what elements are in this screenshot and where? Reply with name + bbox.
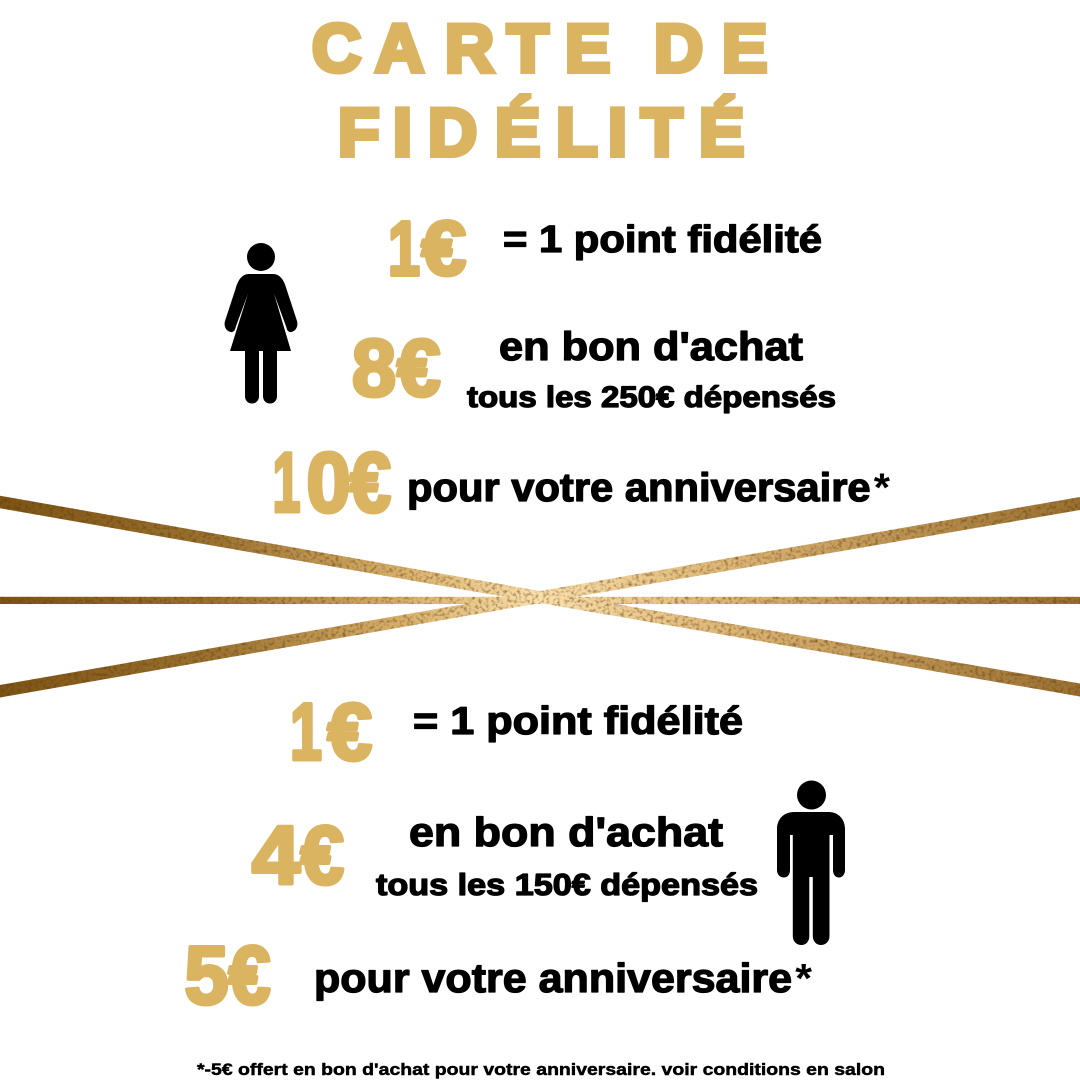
birthday, women: pour votre anniversaire * — [407, 466, 890, 510]
points rate, men — [290, 688, 743, 778]
birthday, women — [272, 436, 890, 530]
birthday, women: 0 — [306, 436, 350, 530]
birthday, women: 1 — [272, 436, 300, 530]
voucher, men: € — [300, 808, 344, 902]
voucher, women — [352, 324, 836, 414]
voucher, women: en bon d'achat — [499, 325, 803, 369]
footnote: *-5€ offert en bon d'achat pour votre anniversaire. voir conditions en salon — [197, 1060, 885, 1079]
points rate, women: 1 — [388, 206, 420, 292]
points rate, men: = 1 point fidélité — [413, 700, 743, 743]
birthday, men: € — [228, 928, 270, 1022]
voucher, men — [252, 808, 758, 902]
icon: woman — [225, 243, 297, 404]
birthday, men: pour votre anniversaire * — [314, 955, 812, 1001]
icon: man — [777, 780, 845, 945]
gold crossed rays divider — [0, 496, 1080, 698]
voucher, women: 8 — [352, 324, 396, 414]
title: FIDÉLITÉ — [338, 94, 744, 170]
points rate, women: = 1 point fidélité — [503, 219, 822, 261]
voucher, men: tous les 150€ dépensés — [376, 867, 758, 902]
voucher, women: € — [397, 324, 440, 414]
birthday, women: € — [350, 436, 391, 530]
points rate, men: 1 — [290, 688, 322, 778]
voucher, men: en bon d'achat — [409, 809, 723, 855]
voucher, men: 4 — [252, 808, 300, 902]
points rate, men: € — [328, 688, 372, 778]
voucher, women: tous les 250€ dépensés — [467, 381, 836, 414]
points rate, women — [388, 206, 822, 292]
title: CARTE DE — [312, 10, 767, 86]
birthday, men: 5 — [184, 928, 228, 1022]
birthday, men — [184, 928, 812, 1022]
title — [312, 10, 767, 170]
points rate, women: € — [422, 206, 466, 292]
